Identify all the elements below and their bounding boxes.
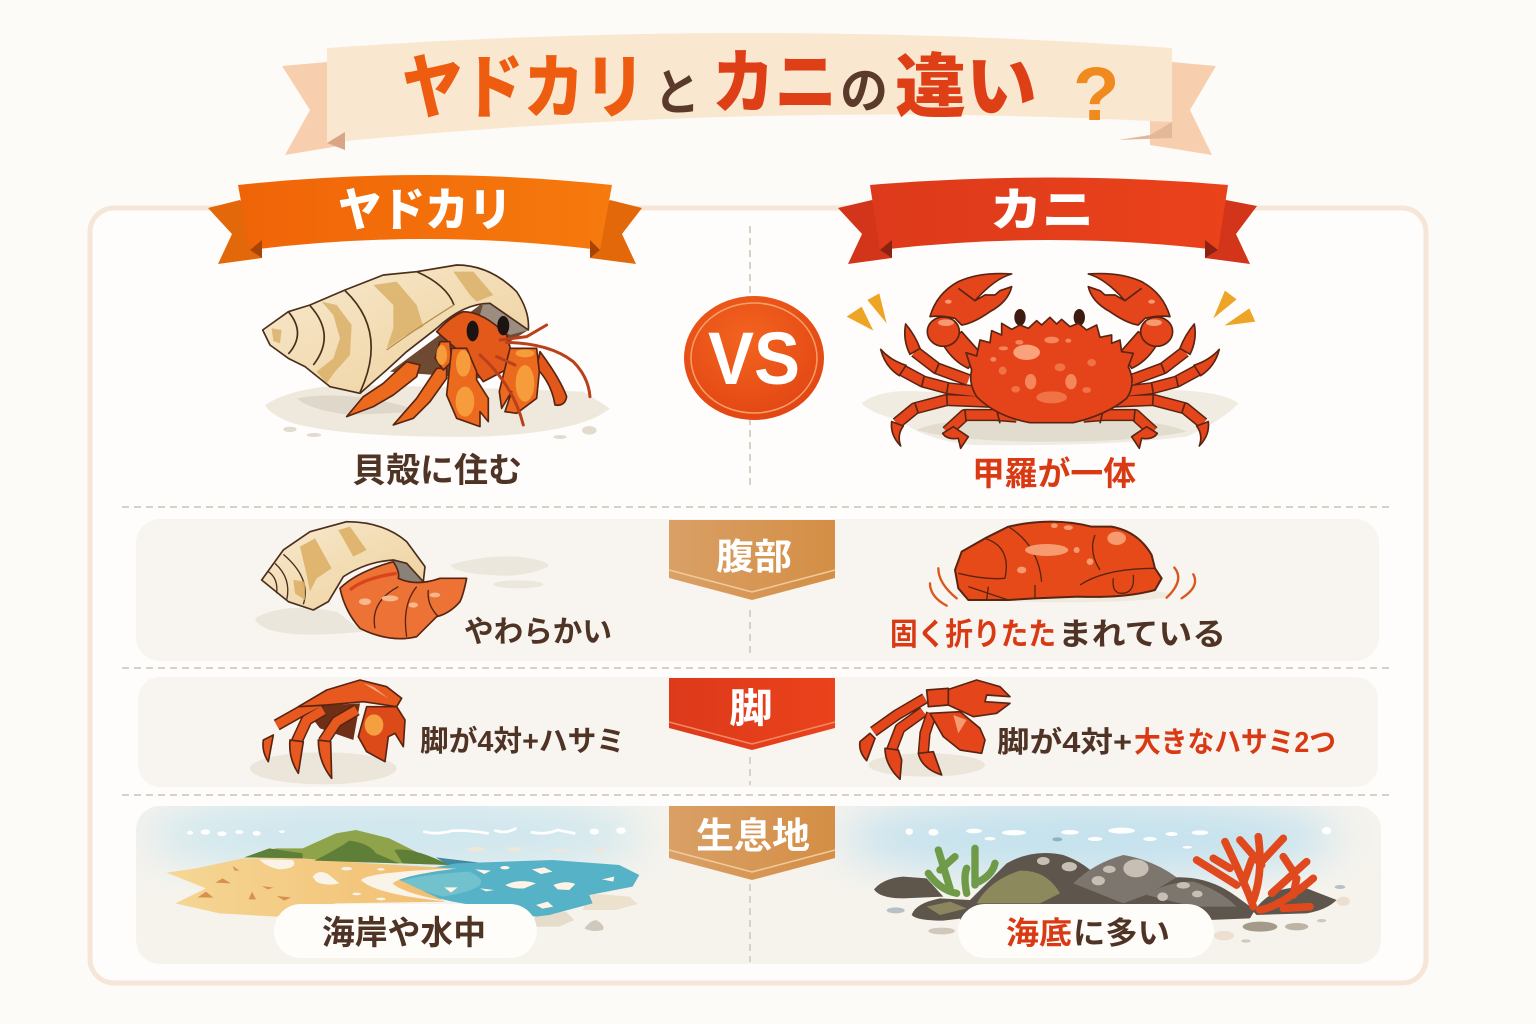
illustration: seabed bbox=[874, 827, 1350, 943]
banner label: カニ bbox=[990, 184, 1094, 236]
tag: abdomen: 腹部 bbox=[716, 536, 792, 577]
illustration: beach bbox=[167, 827, 639, 931]
row background: legs bbox=[138, 677, 1378, 787]
VS text: VS bbox=[708, 317, 800, 400]
banner: hermit crab bbox=[208, 175, 642, 264]
tag: abdomen bbox=[669, 520, 835, 600]
caption: folded hard: 固く折りたた bbox=[890, 617, 1056, 652]
illustration: crab bbox=[847, 274, 1255, 448]
label: seabed bbox=[958, 904, 1214, 958]
title: ? bbox=[1073, 52, 1119, 137]
tag: legs: 脚 bbox=[729, 687, 773, 731]
title bbox=[402, 44, 1119, 137]
row background: habitat bbox=[136, 793, 1381, 964]
row background: abdomen bbox=[136, 519, 1379, 661]
title: の bbox=[840, 63, 888, 119]
label: shore and water bbox=[274, 904, 537, 958]
VS badge bbox=[684, 296, 824, 420]
caption: lives in shell: 貝殻に住む bbox=[352, 452, 522, 490]
caption: folded hard: まれている bbox=[1058, 617, 1226, 652]
label: seabed: に多い bbox=[1073, 916, 1170, 951]
illustration: crab legs bbox=[860, 680, 1010, 779]
caption: crab legs bbox=[997, 725, 1336, 759]
caption: crab legs: 大きなハサミ2つ bbox=[1134, 726, 1336, 759]
illustration: crab abdomen bbox=[930, 522, 1195, 606]
banner label: ヤドカリ bbox=[338, 184, 512, 236]
banner: crab bbox=[838, 178, 1257, 264]
illustration: hermit crab in shell bbox=[263, 265, 610, 439]
tag: habitat bbox=[669, 806, 835, 880]
title: と bbox=[654, 65, 700, 121]
label: seabed: 海底 bbox=[1006, 916, 1072, 951]
caption: folded hard bbox=[890, 617, 1226, 652]
caption: hermit legs: 脚が4対+ハサミ bbox=[420, 724, 625, 758]
title: 違い bbox=[895, 48, 1037, 126]
caption: crab legs: 脚が4対+ bbox=[997, 725, 1132, 759]
title: カニ bbox=[712, 44, 837, 122]
tag: habitat: 生息地 bbox=[696, 815, 810, 856]
label: shore and water: 海岸や水中 bbox=[322, 914, 486, 951]
caption: one-piece carapace: 甲羅が一体 bbox=[972, 455, 1136, 492]
illustration: hermit legs bbox=[250, 680, 405, 784]
caption: soft: やわらかい bbox=[464, 616, 612, 649]
icon: impact marks bbox=[847, 291, 1255, 331]
illustration: hermit abdomen bbox=[255, 522, 548, 639]
tag: legs bbox=[669, 678, 835, 750]
title ribbon bbox=[282, 33, 1216, 155]
title: ヤドカリ bbox=[402, 49, 645, 127]
main panel bbox=[90, 208, 1426, 983]
